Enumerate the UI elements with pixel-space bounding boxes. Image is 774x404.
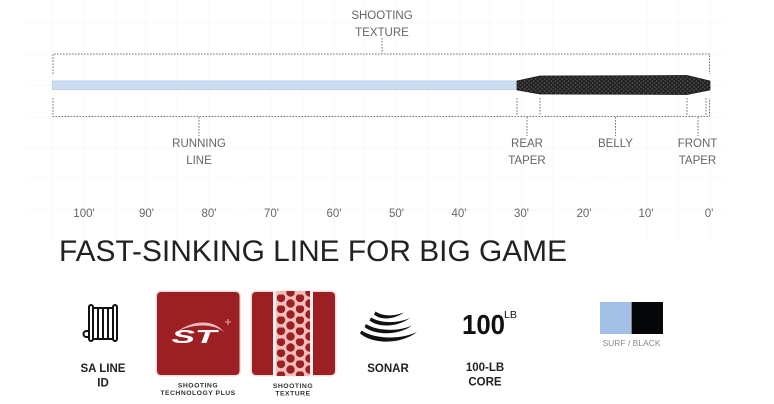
distance scale: 20': [576, 208, 592, 220]
icon: 100 LB: 100: [462, 309, 505, 340]
label: front taper: FRONT: [678, 138, 717, 150]
icon: 100 LB: LB: [504, 309, 517, 321]
shooting texture bracket: [53, 38, 710, 74]
label: surf / black: SURF / BLACK: [602, 338, 661, 348]
distance scale: 0': [705, 208, 713, 220]
swatch: surf: [600, 302, 631, 334]
label: 100-lb core: CORE: [468, 376, 502, 388]
badge: texture: [250, 290, 336, 376]
label: sonar: SONAR: [367, 363, 409, 375]
swatch: black: [632, 302, 663, 334]
icon: sonar arcs: [360, 312, 417, 342]
feature: shooting texture: [250, 290, 336, 398]
section labels: [172, 10, 717, 167]
label: shooting texture: SHOOTING: [273, 383, 313, 390]
running line: [52, 81, 518, 90]
icon: line spool: [84, 305, 117, 341]
title: FAST-SINKING LINE FOR BIG GAME: [59, 235, 567, 268]
label: shooting technology plus: SHOOTING: [178, 382, 218, 390]
distance scale: 100': [73, 208, 95, 220]
label: shooting texture: TEXTURE: [275, 390, 311, 398]
distance scale: 90': [139, 208, 154, 220]
feature: SA line ID: [81, 305, 126, 390]
label: shooting texture: SHOOTING: [351, 10, 413, 22]
label: front taper: TAPER: [679, 155, 716, 167]
label: shooting texture: TEXTURE: [355, 27, 409, 39]
distance scale: 10': [638, 208, 654, 220]
feature: shooting technology plus: [156, 290, 241, 397]
feature: sonar: [360, 312, 417, 375]
distance scale: 70': [264, 208, 279, 220]
shooting head: [517, 76, 710, 94]
label: shooting technology plus: TECHNOLOGY PLUS: [160, 390, 236, 397]
label: belly: BELLY: [598, 138, 633, 150]
distance scale: 60': [326, 208, 342, 220]
label: SA line ID: ID: [97, 378, 109, 390]
label: SA line ID: SA LINE: [81, 363, 125, 375]
feature: 100-lb core: [462, 309, 517, 388]
label: 100-lb core: 100-LB: [466, 362, 504, 374]
colour swatch: [600, 302, 663, 348]
label: rear taper: REAR: [511, 138, 543, 150]
badge: ST+: ST: [172, 327, 220, 347]
distance scale: 80': [202, 208, 216, 220]
distance scale: 40': [452, 208, 466, 220]
distance scale: 50': [389, 208, 404, 220]
lower section bracket: [53, 98, 710, 136]
label: running line: LINE: [186, 155, 212, 167]
distance scale: [73, 208, 713, 220]
distance scale: 30': [514, 208, 529, 220]
line diagram: [52, 38, 710, 136]
label: rear taper: TAPER: [508, 155, 546, 167]
label: running line: RUNNING: [172, 138, 226, 150]
